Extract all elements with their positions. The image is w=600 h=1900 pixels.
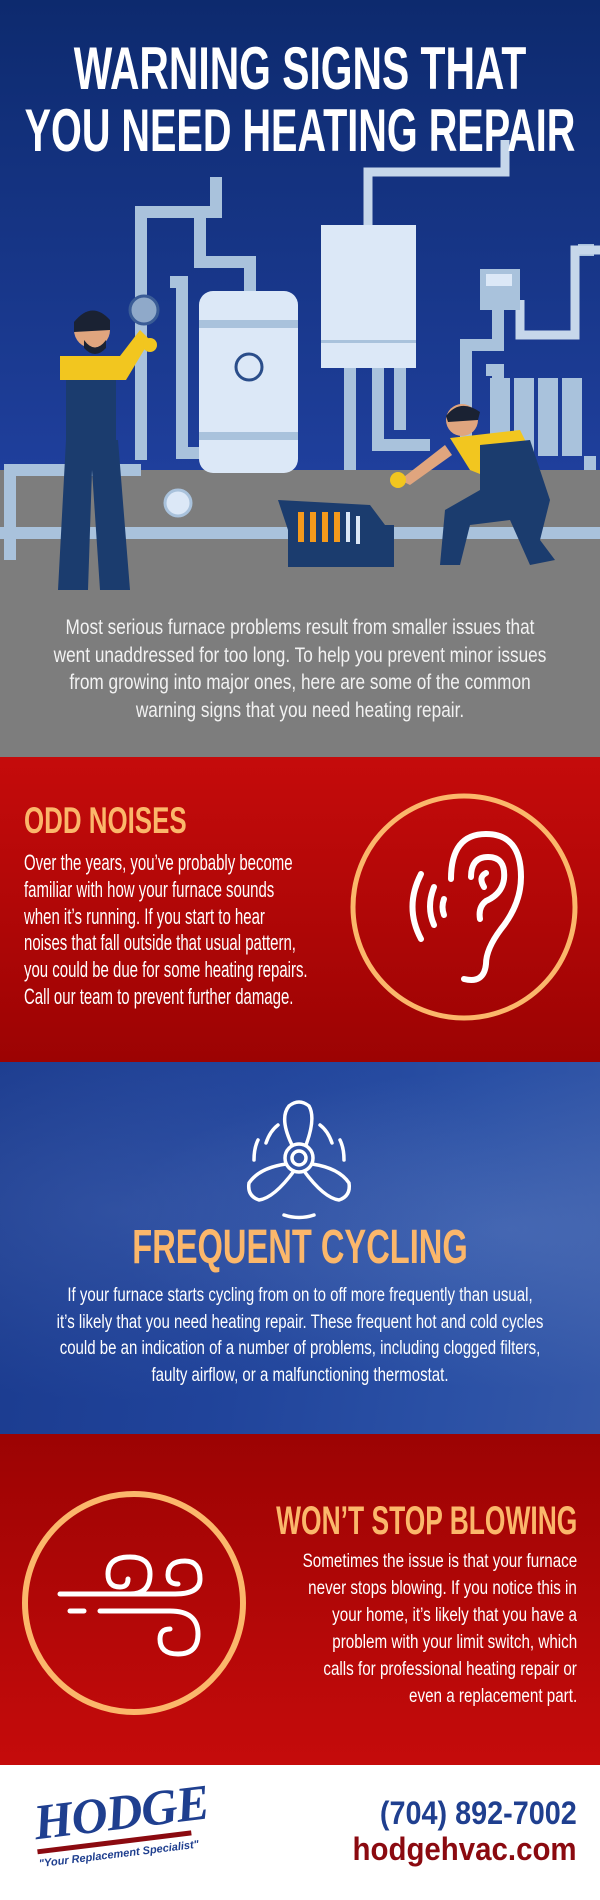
- logo: "Your Replacement Specialist": [38, 1839, 200, 1870]
- header background with illustration: [0, 0, 600, 757]
- text: won't stop blowing: [302, 1551, 577, 1707]
- text: frequent cycling: faulty airflow, or a malfunctioning thermostat.: [151, 1365, 449, 1386]
- logo: HODGE: [30, 1773, 212, 1850]
- text: won't stop blowing: calls for professional heating repair or: [324, 1659, 577, 1680]
- heading: odd noises: ODD NOISES: [24, 800, 187, 841]
- icon: fan: [246, 1100, 351, 1220]
- text: odd noises: Over the years, you’ve probably become: [24, 850, 293, 875]
- text: frequent cycling: could be an indication of a number of problems, including clogged filters,: [60, 1338, 540, 1359]
- illustration: radiator: [490, 378, 582, 456]
- intro text: warning signs that you need heating repair.: [136, 698, 464, 722]
- illustration: pipes: [0, 177, 600, 560]
- panel: won't stop blowing: [0, 1434, 600, 1765]
- text: won't stop blowing: your home, it’s likely that you have a: [332, 1605, 577, 1626]
- text: frequent cycling: If your furnace starts cycling from on to off more frequently than usual,: [67, 1285, 533, 1306]
- website: hodgehvac.com: [353, 1831, 577, 1867]
- icon: wind in circle: [22, 1491, 246, 1715]
- text: odd noises: familiar with how your furnace sounds: [24, 877, 274, 902]
- illustration: toolbox: [278, 500, 394, 567]
- title: [25, 35, 575, 164]
- intro text: [54, 616, 546, 722]
- text: won't stop blowing: Sometimes the issue is that your furnace: [302, 1551, 577, 1572]
- text: odd noises: [24, 850, 308, 1009]
- panel: odd noises: [0, 757, 600, 1062]
- title: WARNING SIGNS THAT: [74, 35, 526, 102]
- footer: [0, 1765, 600, 1900]
- text: frequent cycling: it’s likely that you need heating repair. These frequent hot and cold cycles: [57, 1312, 543, 1333]
- text: odd noises: you could be due for some heating repairs.: [24, 957, 308, 982]
- illustration: tank: [199, 291, 298, 473]
- text: odd noises: when it’s running. If you start to hear: [24, 904, 265, 929]
- illustration: valve: [130, 296, 158, 324]
- text: odd noises: Call our team to prevent further damage.: [24, 984, 293, 1009]
- heading: won't stop blowing: WON’T STOP BLOWING: [276, 1499, 577, 1543]
- intro text: from growing into major ones, here are some of the common: [69, 671, 531, 694]
- text: odd noises: noises that fall outside that usual pattern,: [24, 930, 296, 955]
- text: frequent cycling: [57, 1285, 543, 1386]
- illustration: gauge: [165, 490, 191, 516]
- intro text: Most serious furnace problems result from smaller issues that: [66, 616, 534, 639]
- icon: ear in circle: [350, 794, 578, 1020]
- illustration: right worker: [390, 404, 555, 565]
- text: won't stop blowing: even a replacement part.: [409, 1686, 577, 1707]
- illustration: thermostat: [480, 269, 520, 310]
- illustration: left worker: [58, 310, 157, 590]
- heading: frequent cycling: FREQUENT CYCLING: [132, 1221, 468, 1274]
- illustration: boiler: [321, 225, 416, 368]
- panel: frequent cycling: [0, 1062, 600, 1434]
- title: YOU NEED HEATING REPAIR: [25, 97, 575, 164]
- text: won't stop blowing: problem with your limit switch, which: [332, 1632, 577, 1653]
- intro text: went unaddressed for too long. To help you prevent minor issues: [54, 644, 546, 666]
- phone: (704) 892-7002: [380, 1795, 577, 1831]
- text: won't stop blowing: never stops blowing. If you notice this in: [308, 1578, 577, 1599]
